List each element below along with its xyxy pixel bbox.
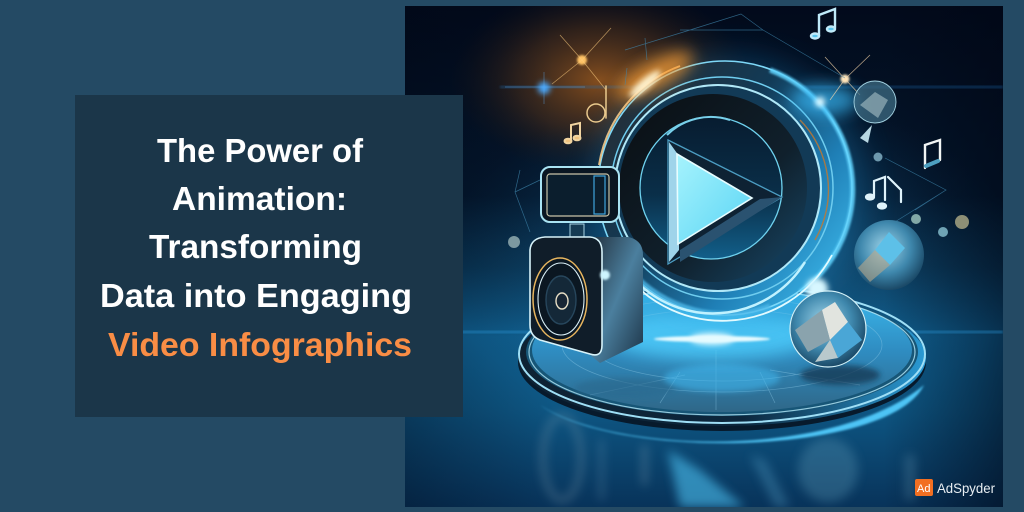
reflections on the floor [543, 416, 915, 507]
note: right flag [925, 140, 940, 168]
note: double [866, 177, 901, 208]
sphere: front [790, 291, 880, 385]
title: Data into Engaging [100, 277, 412, 314]
camera body [530, 237, 643, 363]
title: Video Infographics [108, 326, 412, 363]
note: small orange [564, 123, 580, 143]
illustration: animated video play button scene [405, 0, 1020, 507]
circular platform [518, 285, 926, 431]
large play ring [595, 55, 865, 325]
logo icon: Ad [917, 483, 930, 495]
title: Animation: [172, 180, 347, 217]
logo: AdSpyder [915, 479, 995, 496]
camera screen [541, 167, 619, 237]
logo: AdSpyder: AdSpyder [937, 480, 995, 496]
note: large orange outline [587, 86, 606, 122]
title: Transforming [149, 228, 362, 265]
glow under ring [607, 311, 817, 359]
music notes [564, 9, 940, 208]
play triangle [668, 140, 782, 264]
inner disc [640, 117, 782, 259]
note: top right [811, 9, 835, 38]
sphere: middle right [854, 220, 924, 290]
title panel [75, 95, 463, 417]
sphere: top right [854, 81, 896, 123]
small bubbles [508, 125, 969, 248]
title [100, 132, 412, 363]
lens flares [505, 28, 870, 345]
title: The Power of [157, 132, 364, 169]
thin network lines [515, 14, 946, 232]
crystal spheres [508, 81, 969, 385]
camera [530, 167, 643, 363]
platform glow reflection [540, 385, 924, 443]
